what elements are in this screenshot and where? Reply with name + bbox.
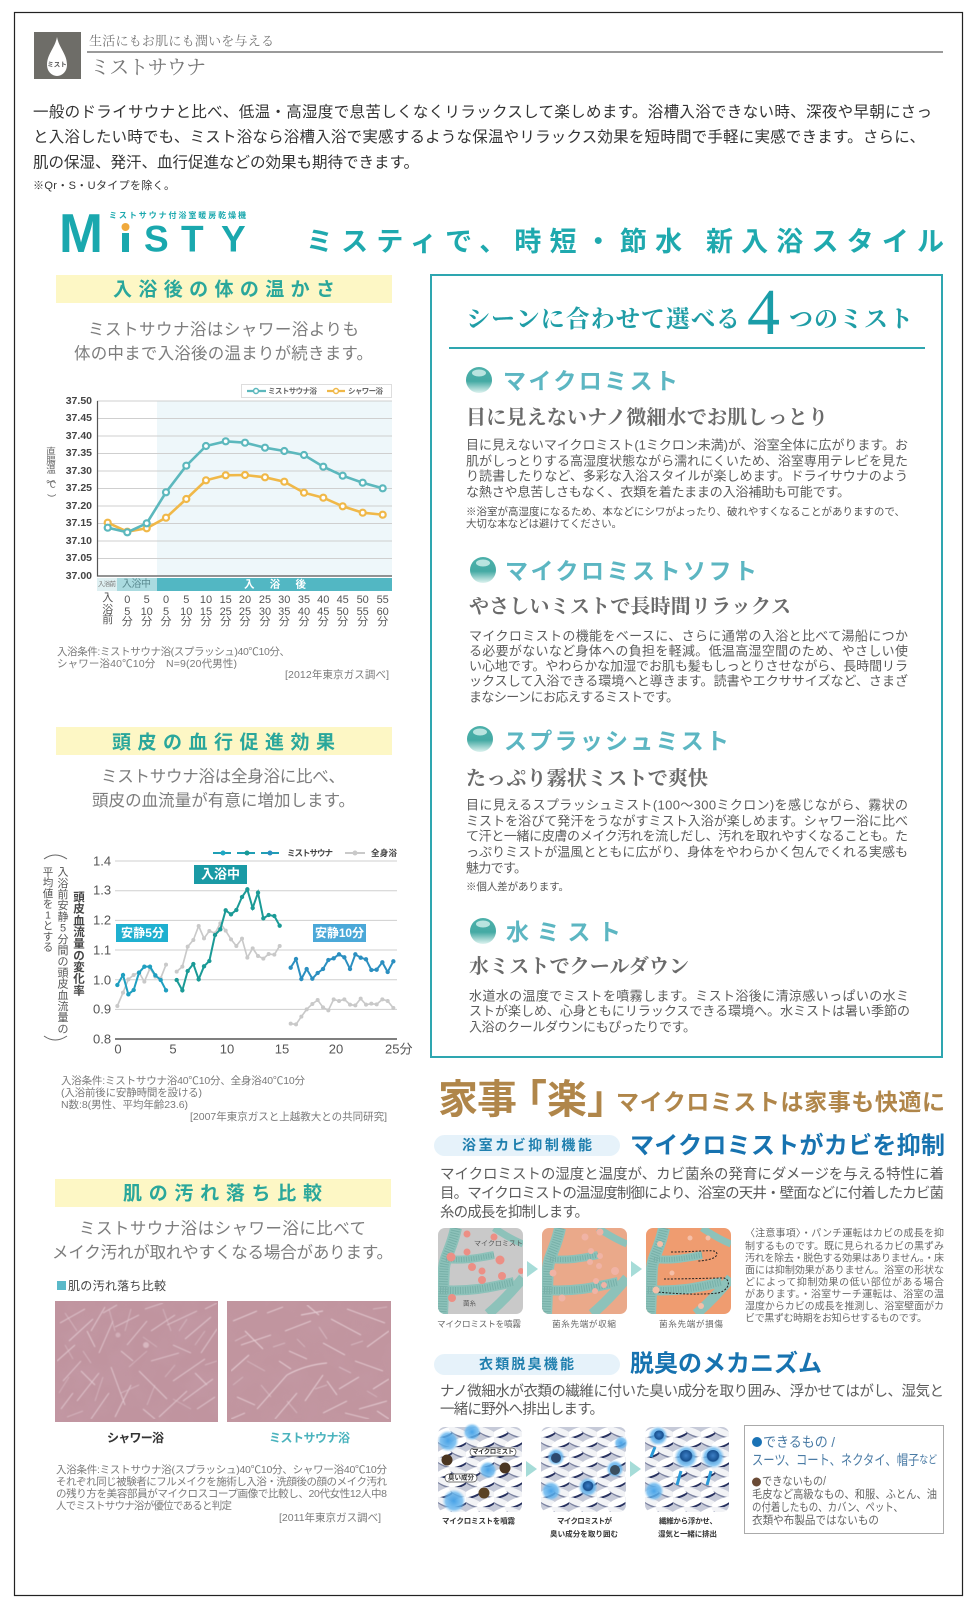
footnote: 人でミストサウナ浴が優位であると判定	[56, 1499, 232, 1512]
body text: マイクロミストの湿度と温度が、カビ菌糸の発育にダメージを与える特性に着	[440, 1166, 944, 1183]
axis titles: 平均値を1とする	[43, 866, 54, 954]
x axis numbers: 0	[114, 1042, 122, 1056]
x axis numbers: 20	[329, 1042, 343, 1056]
phase band: 入浴中	[122, 577, 151, 590]
mist type: micro mist soft: まなシーンにお応えするミストです。	[469, 690, 679, 704]
x axis labels	[102, 592, 389, 628]
callout: rest 5 min	[116, 924, 168, 942]
arrow	[630, 1461, 641, 1477]
footnote: シャワー浴40℃10分 N=9(20代男性)	[57, 657, 237, 670]
series: mist sauna	[105, 438, 386, 535]
callout: rest 5 min: 安静5分	[121, 925, 164, 940]
footnote: (入浴前後に安静時間を設ける)	[61, 1086, 202, 1099]
illustration: mist sprayed: マイクロミスト	[474, 1240, 523, 1248]
x axis labels: 分	[260, 615, 270, 628]
y axis labels: 37.50	[66, 395, 92, 407]
illustration: tips shrink	[542, 1228, 627, 1314]
x axis labels: 45	[337, 594, 349, 606]
x axis labels: 分	[337, 615, 348, 628]
x axis labels: 5	[144, 594, 150, 606]
illustration captions: 菌糸先端が収縮	[552, 1318, 616, 1329]
x axis labels: 35	[298, 594, 310, 606]
x axis labels: 分	[141, 615, 152, 628]
illustration: mist sprayed	[438, 1228, 524, 1314]
lead text	[74, 320, 373, 363]
mist type: micro mist: り読書したりなど、多彩な入浴スタイルが楽しめます。ドライサウナのよう	[466, 468, 908, 484]
mist type: splash mist: て汗と一緒に皮膚のメイク汚れを流しだし、汚れを取れやすくなることも。た	[466, 828, 908, 844]
footnote	[57, 645, 389, 681]
mist type: micro mist soft: ックスして入浴できる環境へと導きます。読書やエクササイズなど、さまざ	[469, 674, 908, 688]
x axis labels: 分	[377, 615, 388, 628]
photo: mist sauna skin	[227, 1301, 391, 1422]
y axis labels: 37.10	[66, 535, 92, 547]
box: applicable items: スーツ、コート、ネクタイ、帽子など	[752, 1452, 937, 1468]
y axis labels: 37.35	[66, 447, 92, 459]
legend	[242, 384, 392, 398]
x axis labels: 分	[160, 615, 172, 628]
body text: 目。マイクロミストの温湿度制御により、浴室の天井・壁面などに付着したカビ菌	[440, 1185, 944, 1202]
x axis labels: 10	[200, 594, 212, 606]
main headline: ミスティで、時短・節水 新入浴スタイル	[306, 227, 944, 257]
footnote: [2011年東京ガス調べ]	[279, 1511, 381, 1524]
logo: MiSTY	[59, 202, 246, 264]
heading bar	[55, 1179, 391, 1207]
x axis labels: 入	[102, 592, 113, 604]
phase band: 入浴後	[244, 578, 306, 590]
x axis labels: 分	[279, 615, 290, 628]
mist type: splash mist: 目に見えるスプラッシュミスト(100〜300ミクロン)を感じながら、霧状の	[466, 798, 908, 812]
legend: シャワー浴	[348, 386, 384, 396]
axis titles	[43, 855, 85, 1040]
box: applicable items: 衣類や布製品ではないもの	[752, 1513, 879, 1527]
mist type: splash mist: スプラッシュミスト	[504, 728, 729, 754]
lead text: ミストサウナ浴は全身浴に比べ、	[101, 767, 345, 786]
x axis labels: 30	[278, 594, 290, 606]
mist type: splash mist: ※個人差があります。	[466, 880, 569, 893]
mist type: splash mist: っぷりミストが温風とともに広がり、身体をやわらかく包んでくれる実感も	[466, 844, 908, 860]
illustration: mist surrounds odor	[541, 1427, 628, 1512]
illustration captions: 臭い成分を取り囲む	[550, 1528, 618, 1538]
illustration captions	[437, 1318, 723, 1329]
lead text: 頭皮の血流量が有意に増加します。	[92, 791, 355, 810]
arrow	[527, 1261, 538, 1277]
line chart: rectal temperature	[46, 384, 392, 628]
footnote: の残り方を美容部員がマイクロスコープ画像で比較し、20代女性12人中8	[56, 1487, 387, 1500]
series: mist rest 10 min	[291, 954, 393, 979]
x axis labels: 分	[298, 615, 310, 628]
x axis labels: 10	[180, 606, 192, 618]
logo: MiSTY: ミストサウナ付浴室暖房乾燥機	[109, 210, 246, 220]
footnote: 入浴条件:ミストサウナ浴(スプラッシュ)40℃10分、	[57, 645, 290, 658]
header tagline: 生活にもお肌にも潤いを与える	[89, 34, 274, 48]
x axis labels: 20	[239, 594, 251, 606]
illustration: mist sprayed on fabric: マイクロミスト	[472, 1446, 514, 1456]
pill label: 衣類脱臭機能	[479, 1356, 574, 1372]
icon: sphere	[467, 726, 493, 752]
lead text	[92, 767, 355, 810]
x axis labels: 45	[317, 606, 329, 618]
intro paragraph: と入浴したい時でも、ミスト浴なら浴槽入浴で実感するような保温やリラックス効果を短時間で手軽に実感できます。さらに、	[33, 128, 925, 146]
header title: ミストサウナ	[90, 57, 206, 79]
panel: skin comparison	[52, 1179, 393, 1524]
lead text	[52, 1219, 393, 1262]
photo labels: シャワー浴	[107, 1430, 164, 1445]
heading bar: 入浴後の体の温かさ	[113, 278, 335, 300]
mist type: micro mist: 目に見えないナノ微細水でお肌しっとり	[466, 406, 828, 429]
heading: 脱臭のメカニズム	[630, 1350, 822, 1378]
mist type: micro mist: 目に見えないマイクロミスト(1ミクロン未満)が、浴室全体に広がります。お	[466, 438, 908, 452]
x axis labels: 前	[102, 612, 113, 626]
panel: deodorizing	[434, 1350, 944, 1538]
mist type: splash mist	[466, 726, 908, 893]
illustration captions: 繊維から浮かせ、	[659, 1516, 717, 1526]
heading: マイクロミストがカビを抑制	[630, 1132, 945, 1160]
x axis labels: 10	[141, 606, 153, 618]
x axis labels: 15	[220, 594, 232, 606]
x axis labels: 25	[220, 606, 232, 618]
icon: mist drop	[34, 32, 81, 79]
x axis numbers: 10	[220, 1042, 234, 1056]
lead text: ミストサウナ浴はシャワー浴に比べて	[79, 1219, 366, 1238]
body text	[440, 1383, 944, 1418]
photo caption title: 肌の汚れ落ち比較	[68, 1279, 166, 1293]
footnote	[61, 1074, 387, 1123]
legend	[213, 848, 397, 858]
mist type: micro mist soft: やさしいミストで長時間リラックス	[469, 595, 791, 618]
pill label	[434, 1135, 620, 1156]
body text	[440, 1166, 944, 1221]
panel title: シーンに合わせて選べる	[466, 306, 740, 333]
icon: sphere	[470, 557, 496, 583]
footnote	[56, 1463, 388, 1524]
lead text: 体の中まで入浴後の温まりが続きます。	[74, 344, 373, 363]
icon: mist drop: ミスト	[47, 60, 67, 68]
box: applicable items	[744, 1426, 944, 1534]
y axis numbers: 1.4	[93, 854, 111, 868]
y axis numbers: 0.9	[93, 1002, 111, 1016]
y axis numbers: 1.3	[93, 882, 111, 898]
x axis labels: 50	[357, 594, 369, 606]
mist type: splash mist: たっぷり霧状ミストで爽快	[466, 766, 708, 790]
logo: MiSTY: M	[59, 202, 103, 264]
x axis labels: 0	[163, 594, 169, 606]
illustration captions: 湿気と一緒に排出	[658, 1528, 717, 1538]
x axis labels: 25	[259, 594, 271, 606]
pill label: 浴室カビ抑制機能	[462, 1137, 592, 1153]
caution note: 制するものです。既に見られるカビの黒ずみ	[745, 1240, 944, 1252]
x axis labels: 25	[239, 606, 251, 618]
intro paragraph: 肌の保湿、発汗、血行促進などの効果も期待できます。	[33, 154, 419, 172]
line chart: scalp blood flow	[43, 848, 412, 1056]
mist type: micro mist: 大切な本などは避けてください。	[466, 517, 622, 530]
y axis labels: 37.25	[66, 482, 92, 494]
y axis labels	[66, 395, 92, 582]
y axis numbers: 1.2	[93, 912, 111, 928]
panel: body warmth	[46, 275, 392, 681]
axis titles: 入浴前安静5分間の頭皮血流量の	[58, 867, 68, 1035]
illustration captions: マイクロミストを噴霧	[437, 1318, 521, 1329]
panel: mold suppression	[434, 1132, 945, 1329]
x axis labels: 55	[377, 594, 389, 606]
x axis labels: 分	[318, 615, 329, 628]
intro paragraph	[33, 103, 932, 192]
y axis title: 直腸温(℃)	[46, 446, 57, 497]
mist type: splash mist: 魅力です。	[466, 860, 527, 876]
logo: MiSTY: T	[181, 218, 204, 260]
y axis labels: 37.00	[66, 570, 92, 582]
mist type: micro mist soft: る必要がないなど身体への負担を軽減。低温高湿空間のため、やさしい使	[469, 644, 908, 658]
x axis labels: 分	[220, 615, 231, 628]
heading bar	[56, 727, 392, 755]
legend: ミストサウナ	[287, 848, 333, 858]
x axis numbers: 15	[275, 1042, 289, 1056]
x axis labels: 浴	[102, 603, 113, 616]
illustration: mist sprayed: 菌糸	[463, 1298, 476, 1308]
icon: sphere	[466, 367, 492, 393]
panel: scalp circulation	[43, 727, 412, 1123]
x axis numbers: 25分	[385, 1042, 412, 1056]
mist type: water mist: 水ミストでクールダウン	[469, 955, 689, 978]
mist type: micro mist: な熱さや息苦しさもなく、衣類を着たままの入浴補助も可能です。	[466, 484, 850, 500]
x axis labels: 5	[163, 606, 169, 618]
caution note	[745, 1226, 944, 1324]
icon: sphere	[470, 918, 496, 944]
y axis labels: 37.40	[66, 430, 92, 442]
y axis labels: 37.15	[66, 517, 92, 529]
x axis labels: 5	[124, 606, 130, 618]
body text: 糸の成長を抑制します。	[440, 1204, 589, 1221]
photo labels	[107, 1430, 350, 1445]
mist type: water mist: 水道水の温度でミストを噴霧します。ミスト浴後に清涼感いっぱいの水ミ	[469, 988, 909, 1004]
series: full bath	[117, 923, 393, 1024]
series: shower	[105, 472, 386, 535]
x axis labels: 30	[259, 606, 271, 618]
illustration captions: 菌糸先端が損傷	[659, 1318, 723, 1329]
lead text: メイク汚れが取れやすくなる場合があります。	[52, 1243, 393, 1262]
illustration: mist sprayed on fabric	[437, 1423, 522, 1513]
x axis labels: 40	[298, 606, 310, 618]
y axis labels: 37.30	[66, 465, 92, 477]
illustration: odor lifted and released	[644, 1426, 729, 1512]
footnote: 入浴条件:ミストサウナ浴(スプラッシュ)40℃10分、シャワー浴40℃10分	[56, 1463, 388, 1476]
mist type: water mist: 入浴のクールダウンにもぴったりです。	[469, 1020, 696, 1034]
mist type: splash mist: ミストを浴びて発汗をうながすミスト入浴が楽しめます。シャワー浴に比べ	[466, 814, 908, 828]
x axis labels: 55	[357, 606, 369, 618]
box: applicable items: できるもの /	[763, 1434, 835, 1450]
mist type: micro mist soft: マイクロミストの機能をベースに、さらに通常の入浴と比べて湯船につか	[469, 628, 908, 644]
x axis labels: 分	[357, 615, 368, 628]
illustration captions	[442, 1516, 717, 1538]
arrow	[631, 1261, 642, 1277]
logo: MiSTY: Y	[221, 218, 246, 260]
mist type: micro mist soft: い心地です。やわらかな加湿でお肌も髪もしっとりさせながら、長時間リラ	[469, 658, 908, 674]
footnote: [2012年東京ガス調べ]	[285, 668, 389, 681]
mist type: micro mist	[466, 367, 908, 530]
x axis labels: 35	[278, 606, 290, 618]
heading bar: 頭皮の血行促進効果	[112, 732, 335, 754]
y axis numbers: 0.8	[93, 1032, 111, 1046]
panel title	[449, 276, 925, 349]
x axis labels: 分	[181, 615, 192, 628]
y axis numbers	[93, 854, 111, 1046]
series: mist during bath	[177, 889, 280, 990]
panel: housework heading: 「楽」	[507, 1078, 627, 1122]
panel: housework heading: マイクロミストは家事も快適に	[616, 1089, 945, 1115]
caution note: があります。・浴室サーチ運転は、浴室の温	[745, 1288, 944, 1300]
x axis labels: 5	[183, 594, 189, 606]
heading bar: 肌の汚れ落ち比較	[123, 1182, 322, 1204]
x axis labels: 15	[200, 606, 212, 618]
mist type: water mist: ストが楽しめ、心身ともにリラックスできる環境へ。水ミストは暑い季節の	[469, 1004, 910, 1018]
intro paragraph: 一般のドライサウナと比べ、低温・高湿度で息苦しくなくリラックスして楽しめます。浴槽入浴できない時、深夜や早朝にさっ	[33, 103, 932, 121]
caution note: 湿度からカビの成長を推測し、浴室壁面がカ	[745, 1300, 944, 1312]
x axis numbers	[114, 1042, 412, 1056]
box: applicable items: 毛皮など高級なもの、和服、ふとん、油	[752, 1487, 937, 1501]
illustration: mist sprayed on fabric: 臭い成分	[448, 1472, 474, 1482]
heading bar	[56, 275, 392, 303]
mist type: micro mist soft: マイクロミストソフト	[505, 558, 757, 584]
callout: during bath	[194, 865, 247, 884]
footnote: 入浴条件:ミストサウナ浴40℃10分、全身浴40℃10分	[61, 1074, 306, 1087]
caution note: 面には抑制効果がありません。浴室の形状な	[745, 1264, 944, 1276]
x axis numbers: 5	[169, 1042, 177, 1056]
caution note: ビで黒ずむ時期をお知らせするものです。	[745, 1312, 927, 1324]
illustration captions: マイクロミストを噴霧	[442, 1516, 516, 1526]
y axis labels: 37.20	[66, 500, 92, 512]
panel title: つのミスト	[789, 307, 913, 333]
panel: housework heading: 家事	[438, 1078, 517, 1122]
illustration: tips damaged	[646, 1228, 731, 1314]
pill label	[434, 1354, 620, 1375]
x axis labels: 分	[122, 615, 133, 628]
y axis labels: 37.05	[66, 552, 92, 564]
photo labels: ミストサウナ浴	[269, 1430, 350, 1445]
y axis labels: 37.45	[66, 412, 92, 424]
phase band: 入浴前	[98, 579, 116, 588]
legend: 全身浴	[371, 848, 397, 858]
mist type: micro mist soft	[469, 557, 908, 704]
axis titles: 頭皮血流量の変化率	[73, 891, 85, 997]
panel: four mist types	[431, 275, 942, 1057]
footnote: [2007年東京ガスと上越教大との共同研究]	[190, 1110, 387, 1123]
mist type: micro mist: マイクロミスト	[503, 368, 678, 394]
x axis labels: 分	[240, 615, 250, 628]
y axis numbers: 1.0	[93, 972, 111, 988]
intro paragraph: ※Qr・S・Uタイプを除く。	[33, 178, 175, 192]
header	[34, 32, 943, 79]
legend: ミストサウナ浴	[268, 386, 318, 396]
photo: shower skin	[55, 1301, 218, 1422]
caution note: 汚れを除去・脱色する効果はありません。・床	[745, 1252, 944, 1264]
y axis numbers: 1.1	[93, 942, 111, 958]
lead text: ミストサウナ浴はシャワー浴よりも	[88, 320, 359, 339]
mist type: water mist: 水ミスト	[506, 919, 621, 945]
logo: MiSTY: S	[144, 218, 169, 260]
x axis labels: 40	[317, 594, 329, 606]
series: mist rest 5 min	[117, 967, 166, 994]
series plotted in zoom coordinates	[117, 889, 393, 1024]
footnote: それぞれ同じ被験者にフルメイクを施術し入浴・洗顔後の顔のメイク汚れ	[56, 1475, 388, 1488]
caution note: 〈注意事項〉・パンチ運転はカビの成長を抑	[745, 1226, 944, 1240]
x axis labels: 分	[200, 615, 212, 628]
x axis labels: 0	[124, 594, 130, 606]
panel: housework heading	[438, 1078, 945, 1122]
x axis labels: 60	[377, 606, 389, 618]
callout: during bath: 入浴中	[201, 866, 240, 882]
caution note: どによって抑制効果の低い部位がある場合	[745, 1276, 944, 1288]
body text: 一緒に野外へ排出します。	[440, 1401, 604, 1418]
panel title: 4	[747, 276, 780, 349]
footnote: N数:8(男性、平均年齢23.6)	[61, 1098, 188, 1111]
callout: rest 10 min: 安静10分	[315, 925, 364, 940]
body text: ナノ微細水が衣類の繊維に付いた臭い成分を取り囲み、浮かせてはがし、湿気と	[440, 1383, 944, 1400]
illustration captions: マイクロミストが	[557, 1516, 612, 1526]
phase band	[97, 577, 392, 591]
x axis labels: 50	[337, 606, 349, 618]
arrow	[526, 1461, 537, 1477]
mist type: micro mist: ※浴室が高湿度になるため、本などにシワがよったり、破れやすくなることがありますので、	[466, 505, 905, 518]
mist type: water mist	[469, 918, 910, 1034]
mist type: micro mist: 肌がしっとりする高湿度状態ながら濡れにくいため、浴室専用テレビを見た	[466, 454, 908, 468]
box: applicable items: できないもの/	[762, 1475, 827, 1488]
box: applicable items: の付着したもの、カバン、ペット、	[752, 1500, 903, 1514]
